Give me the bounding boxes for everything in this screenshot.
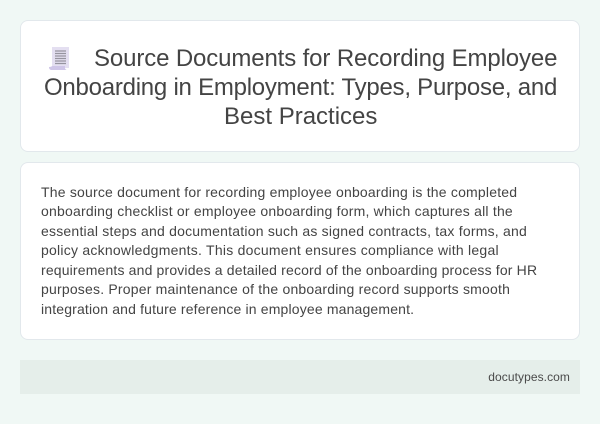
footer source label: docutypes.com xyxy=(488,370,570,384)
description text: purposes. Proper maintenance of the onboarding record supports smooth xyxy=(41,281,510,297)
title: Source Documents for Recording Employee xyxy=(94,45,557,72)
panel: title card xyxy=(20,20,580,152)
footer bar xyxy=(20,360,580,394)
icon: document scroll xyxy=(49,47,69,70)
title: Onboarding in Employment: Types, Purpose, and xyxy=(44,74,557,101)
description text: integration and future reference in employee management. xyxy=(41,301,414,317)
panel: description card xyxy=(20,162,580,340)
description text: policy acknowledgments. This document ensures compliance with legal xyxy=(41,242,499,258)
description text: essential steps and documentation such as signed contracts, tax forms, and xyxy=(41,223,527,239)
title xyxy=(44,45,557,130)
description text xyxy=(41,184,537,317)
title: Best Practices xyxy=(224,103,377,130)
description text: onboarding checklist or employee onboarding form, which captures all the xyxy=(41,203,513,219)
description text: The source document for recording employee onboarding is the completed xyxy=(41,184,517,200)
description text: requirements and provides a detailed record of the onboarding process for HR xyxy=(41,262,537,278)
